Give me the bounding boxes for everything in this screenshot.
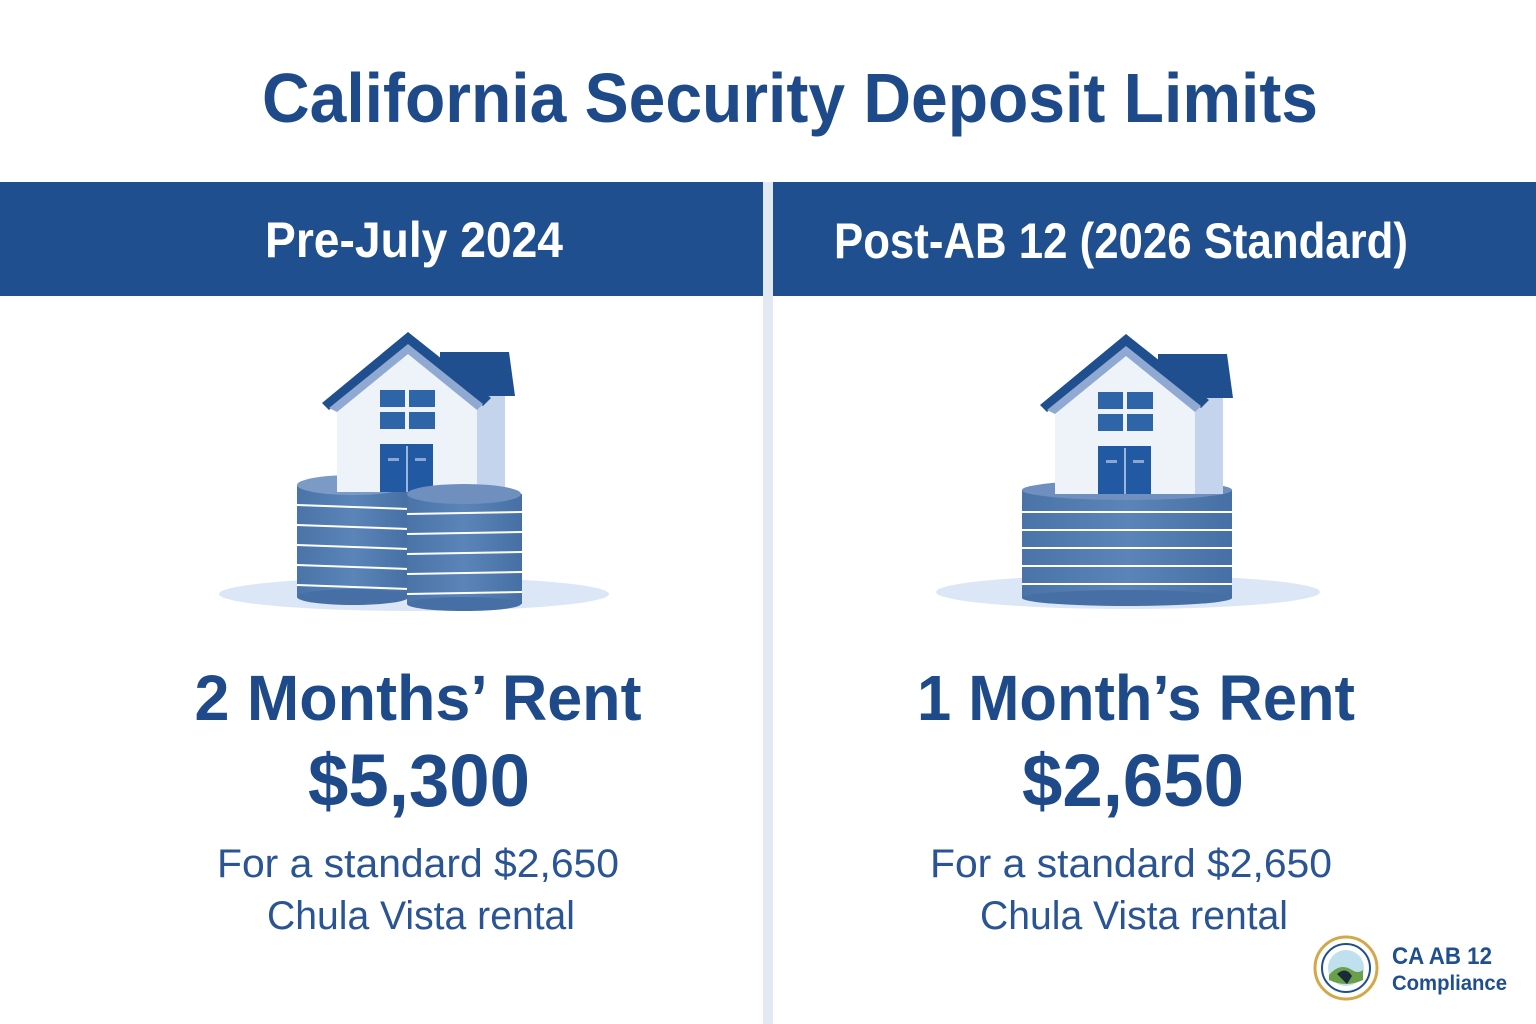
text: description left: Chula Vista rental xyxy=(267,894,575,938)
header: pre-July 2024: Pre-July 2024 xyxy=(265,212,563,268)
badge: CA AB 12 compliance: CA AB 12 xyxy=(1392,943,1492,970)
icon: house on one coin stack xyxy=(936,334,1320,609)
title: California Security Deposit Limits xyxy=(262,59,1318,137)
badge: CA AB 12 compliance: Compliance xyxy=(1392,972,1507,995)
text: description right: Chula Vista rental xyxy=(980,894,1288,938)
text: description right: For a standard $2,650 xyxy=(930,842,1332,886)
text: description left xyxy=(217,842,619,938)
header: post-AB 12 xyxy=(773,182,1536,296)
text: $2,650: $2,650 xyxy=(1022,739,1244,822)
text: description left: For a standard $2,650 xyxy=(217,842,619,886)
header: pre-July 2024 xyxy=(0,182,763,296)
icon: house on two coin stacks xyxy=(219,332,609,611)
header: post-AB 12: Post-AB 12 (2026 Standard) xyxy=(834,213,1408,269)
icon: seal xyxy=(1315,937,1377,999)
text: 1 month's rent: 1 Month’s Rent xyxy=(917,662,1355,734)
text: $5,300: $5,300 xyxy=(308,739,530,822)
panel: post-AB 12 xyxy=(773,182,1536,938)
text: description right xyxy=(930,842,1332,938)
divider xyxy=(763,182,773,1024)
panel: pre-July 2024 xyxy=(0,182,763,938)
text: 2 months' rent: 2 Months’ Rent xyxy=(194,662,642,734)
badge: CA AB 12 compliance xyxy=(1315,937,1507,999)
